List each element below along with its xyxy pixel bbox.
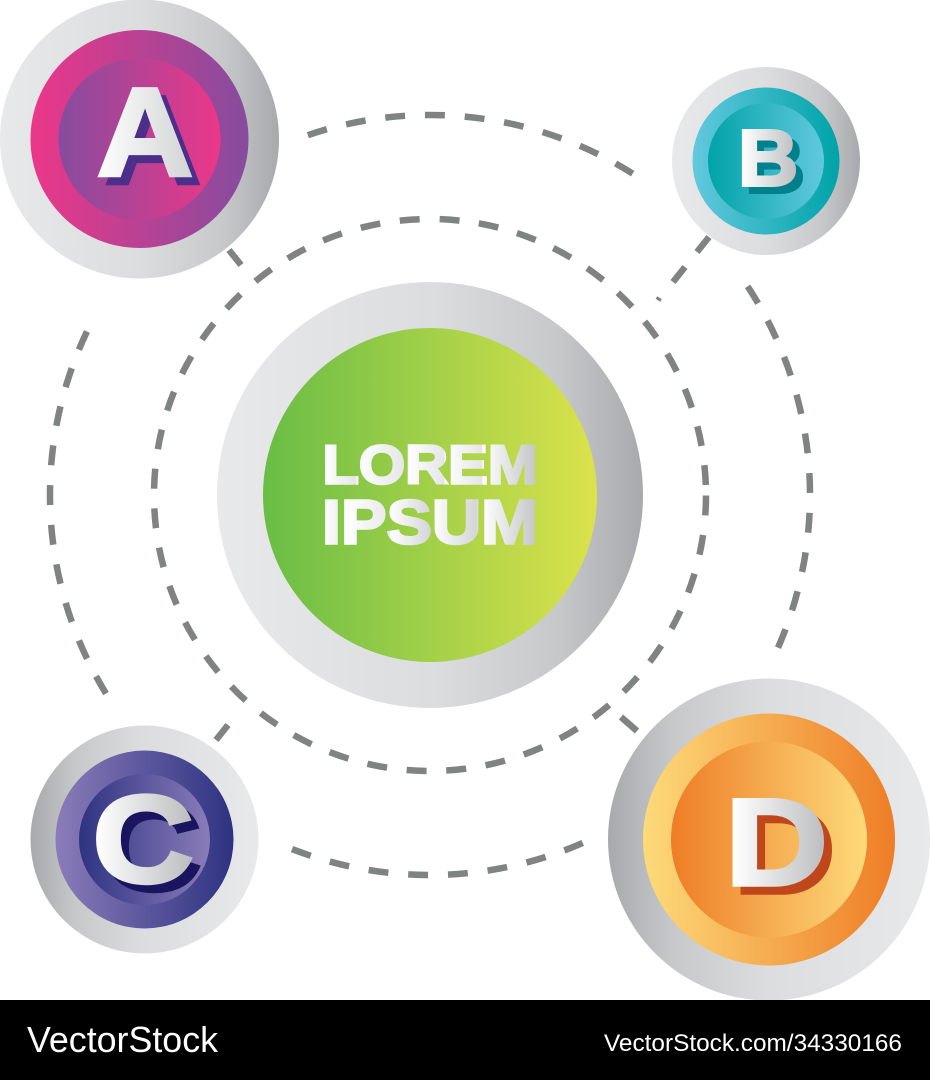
badge D: D bbox=[725, 774, 828, 912]
footer bar bbox=[0, 1000, 930, 1080]
connector dashes to badges bbox=[216, 237, 709, 740]
badge C: C bbox=[101, 779, 202, 917]
badge A bbox=[0, 0, 279, 278]
badge A: A bbox=[97, 62, 193, 202]
badge B: B bbox=[745, 120, 805, 210]
footer brand: VectorStock bbox=[27, 1019, 219, 1060]
badge C bbox=[30, 726, 258, 954]
badge B: B bbox=[738, 114, 798, 202]
centre label: LOREM bbox=[322, 435, 538, 496]
badge B bbox=[672, 67, 860, 255]
centre label: IPSUM bbox=[322, 489, 538, 558]
badge C: C bbox=[93, 771, 194, 909]
dashed ring: inner bbox=[145, 210, 715, 780]
centre badge bbox=[217, 282, 643, 708]
badge A: A bbox=[105, 70, 201, 210]
centre label bbox=[322, 435, 538, 558]
footer url: VectorStock.com/34330166 bbox=[604, 1030, 902, 1057]
badge D bbox=[608, 678, 930, 1000]
badge D: D bbox=[733, 782, 836, 920]
